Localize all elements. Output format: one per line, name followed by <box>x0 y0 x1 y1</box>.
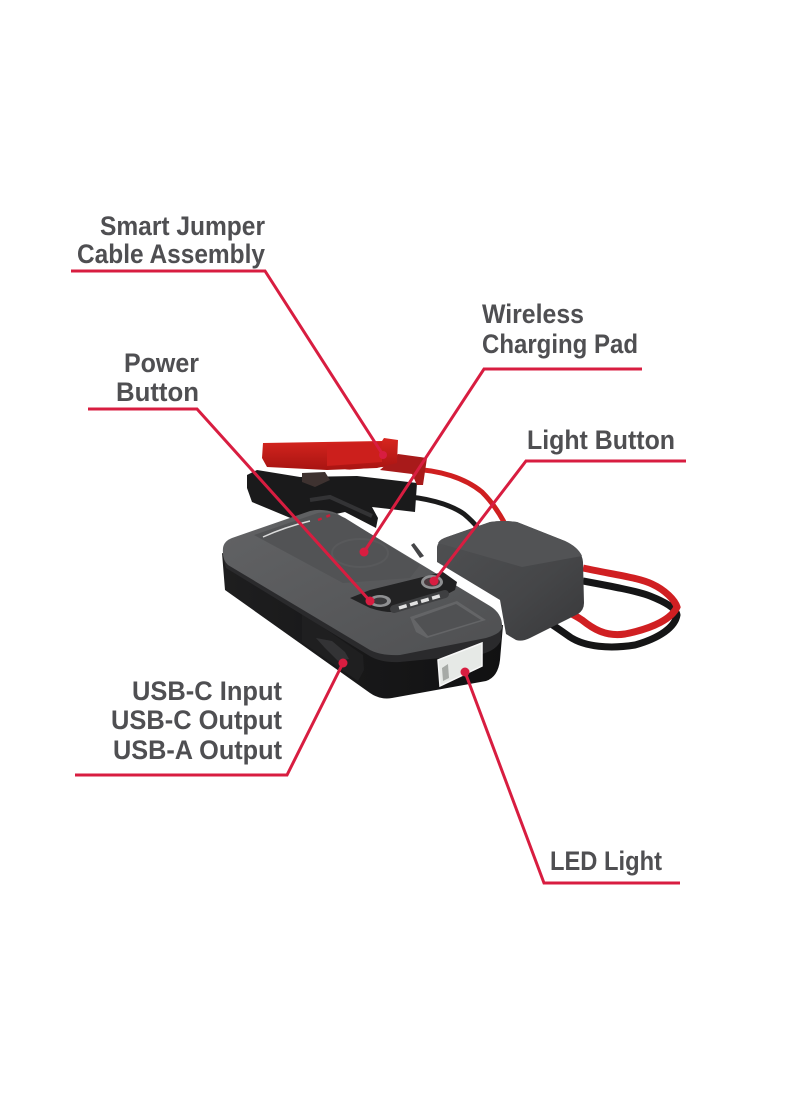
callout: USB ports: USB-C Output <box>111 705 282 735</box>
callout: Smart Jumper Cable Assembly: Cable Assembly <box>77 239 265 269</box>
wire module <box>437 521 584 641</box>
control panel <box>350 572 457 612</box>
device edge band <box>222 553 502 662</box>
red clamp <box>262 438 427 485</box>
light button <box>421 575 443 589</box>
USB icon and port <box>316 638 349 661</box>
charging coil ring <box>332 539 388 567</box>
led light <box>438 643 482 686</box>
latch between device and module <box>411 543 424 558</box>
callout: LED Light <box>460 668 680 883</box>
callout: Smart Jumper Cable Assembly: Smart Jumper <box>100 211 265 241</box>
callout: USB ports <box>75 658 348 775</box>
callout: Wireless Charging Pad <box>360 299 642 556</box>
callout: Light Button: Light Button <box>527 425 675 455</box>
grip recess <box>410 601 486 638</box>
red cable to clamp <box>410 469 504 522</box>
callout: USB ports: USB-C Input <box>132 676 282 706</box>
product: jump starter with cables <box>222 438 677 698</box>
cable loop black <box>545 581 677 647</box>
callout: Wireless Charging Pad: Wireless <box>482 299 584 329</box>
black cable to clamp <box>395 496 478 528</box>
logo script <box>263 521 310 537</box>
callout: USB ports: USB-A Output <box>113 735 282 765</box>
callout: Power Button: Button <box>116 377 199 407</box>
callout: LED Light: LED Light <box>550 846 662 876</box>
status LEDs <box>394 594 445 609</box>
callout: Wireless Charging Pad: Charging Pad <box>482 329 638 359</box>
callout: Power Button <box>88 348 374 606</box>
black clamp <box>247 470 417 528</box>
callout: Power Button: Power <box>124 348 199 378</box>
cable loop red <box>565 568 677 635</box>
wireless pad <box>254 513 420 583</box>
USB port door panel <box>302 613 364 681</box>
device top face <box>223 510 502 655</box>
callout: Smart Jumper Cable Assembly <box>71 211 387 459</box>
callout: Light Button <box>430 425 686 586</box>
red logo marks <box>318 514 333 520</box>
device side <box>222 553 503 698</box>
power button <box>369 595 391 607</box>
